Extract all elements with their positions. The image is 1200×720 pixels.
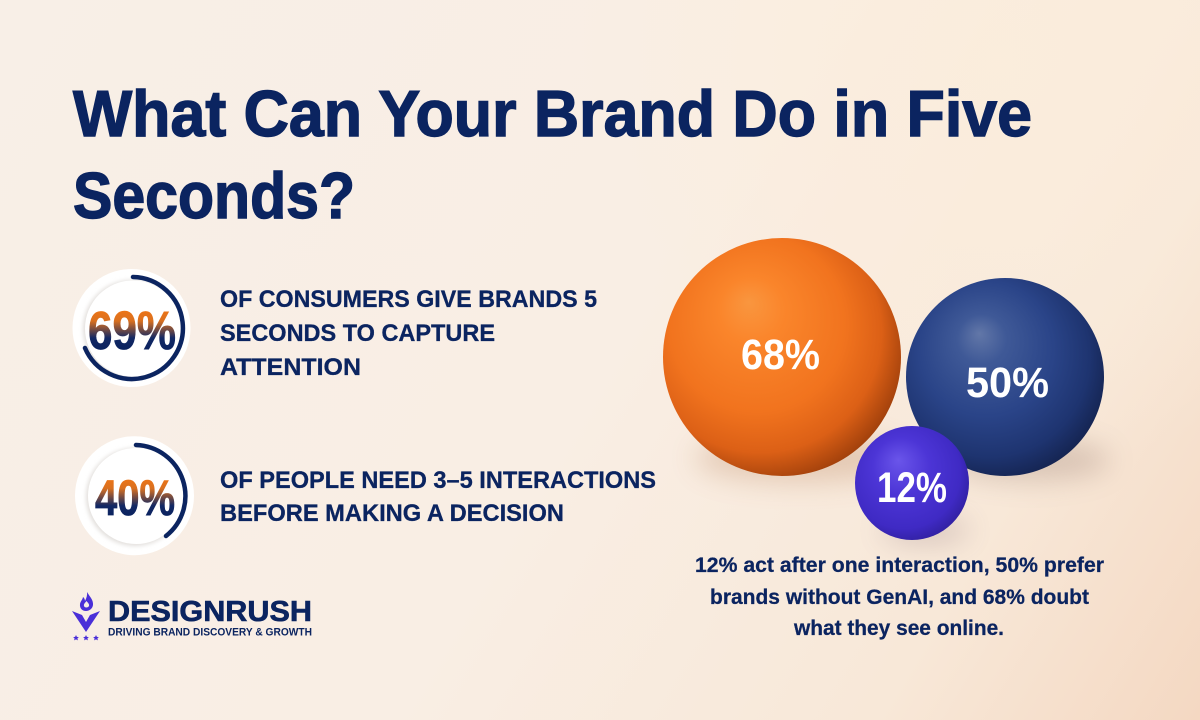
bubble chart [663,238,1110,543]
tagline: DRIVING BRAND DISCOVERY & GROWTH [108,626,312,638]
progress ring: 69% [72,269,190,387]
bubble: 12%: 12% [877,464,947,512]
text: 40 percent description [220,467,656,527]
logo: DesignRush [72,592,312,640]
title: What Can Your Brand Do in Five [73,77,1032,150]
text: 40 percent description: OF PEOPLE NEED 3–5 INTERACTIONS [220,467,656,494]
stat: 69 percent [72,269,190,387]
value: 69%: 69% [88,301,176,361]
title: Seconds? [73,159,355,232]
text: 40 percent description: BEFORE MAKING A DECISION [220,500,564,527]
text: 69 percent description: SECONDS TO CAPTURE [220,320,495,347]
text: 69 percent description [220,286,597,381]
text: 69 percent description: OF CONSUMERS GIVE BRANDS 5 [220,286,597,313]
wordmark: DESIGNRUSH [108,596,312,628]
caption [695,554,1104,640]
bubble: 50%: 50% [966,359,1049,407]
progress ring: 40% [75,436,194,555]
bubble: 12% [855,426,969,540]
text: 69 percent description: ATTENTION [220,354,361,381]
caption: brands without GenAI, and 68% doubt [710,586,1089,609]
value: 40%: 40% [95,470,175,526]
bubble: 50% [906,278,1104,476]
title [73,77,1032,232]
bubble: 68%: 68% [741,331,820,379]
caption: 12% act after one interaction, 50% prefer [695,554,1104,577]
caption: what they see online. [793,617,1004,640]
stat: 40 percent [75,436,194,555]
icon: flame and V with stars [72,592,100,640]
bubble: 68% [663,238,901,476]
